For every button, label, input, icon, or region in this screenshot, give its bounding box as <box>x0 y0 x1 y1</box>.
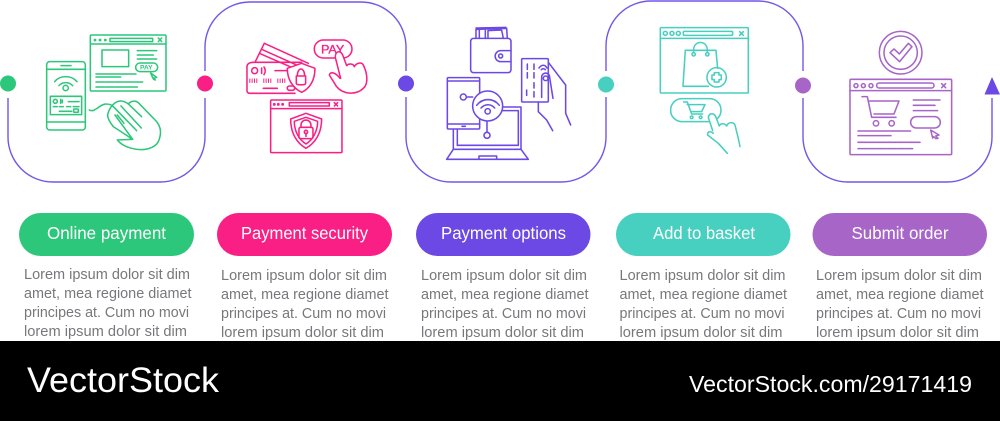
text block: online payment: lorem ipsum dolor sit dim <box>24 324 187 340</box>
text block: submit order: principes at. Cum no movi <box>816 306 981 322</box>
icon: online payment: PAY <box>140 65 153 72</box>
timeline path <box>8 1 992 182</box>
text block: payment security: Lorem ipsum dolor sit dim <box>221 268 387 284</box>
text block: online payment: principes at. Cum no movi <box>24 305 189 321</box>
text block: payment options: lorem ipsum dolor sit dim <box>421 325 584 341</box>
text block: add to basket <box>620 268 787 341</box>
column: payment security <box>217 213 392 341</box>
pill: submit order: Submit order <box>852 223 949 243</box>
text block: add to basket: amet, mea regione diamet <box>620 287 787 303</box>
pill: payment options: Payment options <box>441 223 566 243</box>
icon: add to basket <box>660 28 748 153</box>
icon: submit order <box>850 31 952 155</box>
pill: add to basket <box>616 213 790 256</box>
text block: online payment: amet, mea regione diamet <box>24 286 192 302</box>
icon: payment options <box>447 27 571 159</box>
icon: payment security: PAY <box>321 42 344 56</box>
pill: online payment <box>19 213 194 256</box>
pill: payment options <box>416 213 590 256</box>
text block: online payment: Lorem ipsum dolor sit dim <box>24 267 190 283</box>
text block: add to basket: lorem ipsum dolor sit dim <box>620 325 782 341</box>
pill: submit order <box>812 213 987 256</box>
icon: online payment <box>47 35 166 150</box>
VectorStock logo: VectorStock <box>27 361 220 400</box>
watermark band <box>0 341 1000 421</box>
text block: payment security: principes at. Cum no movi <box>221 306 386 322</box>
column: submit order <box>812 213 987 341</box>
pill: add to basket: Add to basket <box>653 223 755 243</box>
text block: payment security: lorem ipsum dolor sit dim <box>221 325 384 341</box>
column: online payment <box>19 213 194 340</box>
text block: submit order: amet, mea regione diamet <box>816 287 984 303</box>
icon: payment security <box>247 40 367 153</box>
text block: submit order: Lorem ipsum dolor sit dim <box>816 268 982 284</box>
image id: VectorStock.com/29171419 <box>689 371 972 397</box>
text block: add to basket: principes at. Cum no movi <box>620 306 784 322</box>
column: add to basket <box>616 213 790 341</box>
text block: payment security: amet, mea regione diamet <box>221 287 388 303</box>
text block: payment options: amet, mea regione diamet <box>421 287 588 303</box>
pill: payment security <box>217 213 392 256</box>
text block: online payment <box>24 267 192 340</box>
pill: payment security: Payment security <box>241 223 368 243</box>
text block: add to basket: Lorem ipsum dolor sit dim <box>620 268 786 284</box>
text block: submit order <box>816 268 984 341</box>
column: payment options <box>416 213 590 341</box>
text block: payment options: principes at. Cum no movi <box>421 306 586 322</box>
text block: submit order: lorem ipsum dolor sit dim <box>816 325 979 341</box>
text block: payment options: Lorem ipsum dolor sit dim <box>421 268 587 284</box>
step markers <box>0 76 1000 94</box>
text block: payment security <box>221 268 388 341</box>
text block: payment options <box>421 268 588 341</box>
pill: online payment: Online payment <box>47 223 166 243</box>
